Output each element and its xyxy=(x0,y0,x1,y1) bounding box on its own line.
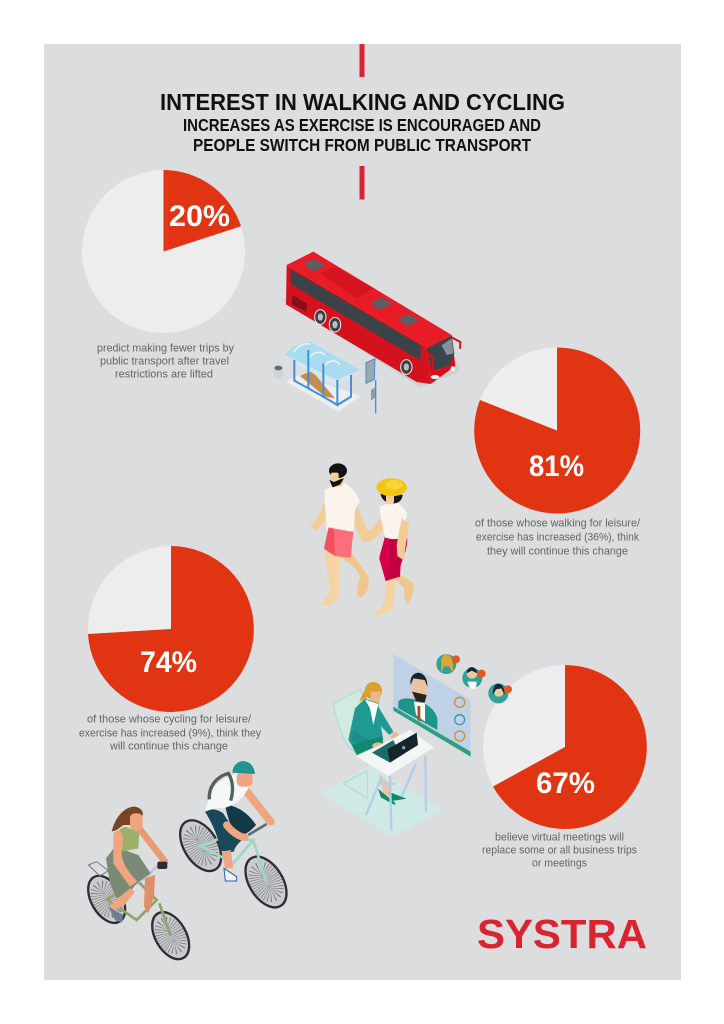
bus xyxy=(282,252,460,387)
pie chart: 74% xyxy=(88,546,254,712)
pie chart: 81% xyxy=(474,347,640,514)
main heading: INTEREST IN WALKING AND CYCLING xyxy=(160,89,565,115)
caption: 20%: predict making fewer trips by xyxy=(97,342,235,354)
pie chart: 67%: 67% xyxy=(536,767,595,800)
pie chart: 67% xyxy=(483,665,647,829)
illustration: cyclists xyxy=(81,761,295,966)
caption: 20%: public transport after travel xyxy=(100,356,229,368)
subheading line 2: PEOPLE SWITCH FROM PUBLIC TRANSPORT xyxy=(193,135,531,155)
caption: 81%: exercise has increased (36%), think xyxy=(476,532,640,544)
chair xyxy=(333,689,368,798)
bus shelter xyxy=(274,342,376,413)
illustration: virtual meeting xyxy=(320,652,512,837)
bottom accent bar xyxy=(360,166,364,200)
title block xyxy=(160,89,565,155)
video screen xyxy=(393,654,471,757)
caption: 20%: restrictions are lifted xyxy=(115,368,213,380)
pie chart: 81%: 81% xyxy=(529,450,584,483)
caption: 67%: believe virtual meetings will xyxy=(495,832,624,844)
illustration: couple walking xyxy=(311,463,414,616)
caption: 74%: will continue this change xyxy=(109,740,228,752)
floor mat xyxy=(320,765,442,837)
top accent bar xyxy=(360,44,364,77)
logo: SYSTRA: SYSTRA xyxy=(477,911,647,957)
male cyclist xyxy=(172,761,295,915)
female cyclist xyxy=(81,807,197,966)
man xyxy=(311,463,370,606)
illustration: bus and shelter xyxy=(274,252,460,413)
pie chart: 20%: 20% xyxy=(169,200,230,233)
caption: 74% xyxy=(79,714,262,752)
caption: 67%: or meetings xyxy=(532,858,587,870)
caption: 74%: exercise has increased (9%), think they xyxy=(79,728,262,740)
desk xyxy=(357,730,434,831)
caption: 81%: of those whose walking for leisure/ xyxy=(475,518,640,530)
caption: 74%: of those whose cycling for leisure/ xyxy=(87,714,251,726)
woman at desk xyxy=(348,682,403,804)
subheading line 1: INCREASES AS EXERCISE IS ENCOURAGED AND xyxy=(183,115,541,135)
caption: 81%: they will continue this change xyxy=(487,546,628,558)
pie chart: 74%: 74% xyxy=(140,646,197,679)
caption: 67% xyxy=(482,832,637,870)
caption: 67%: replace some or all business trips xyxy=(482,844,637,856)
laptop xyxy=(372,733,418,763)
pie chart: 20% xyxy=(82,170,245,333)
caption: 81% xyxy=(475,518,640,558)
caption: 20% xyxy=(97,342,235,380)
wheels xyxy=(172,813,295,915)
avatars xyxy=(436,652,512,704)
woman xyxy=(361,478,414,616)
wheels xyxy=(81,869,197,966)
